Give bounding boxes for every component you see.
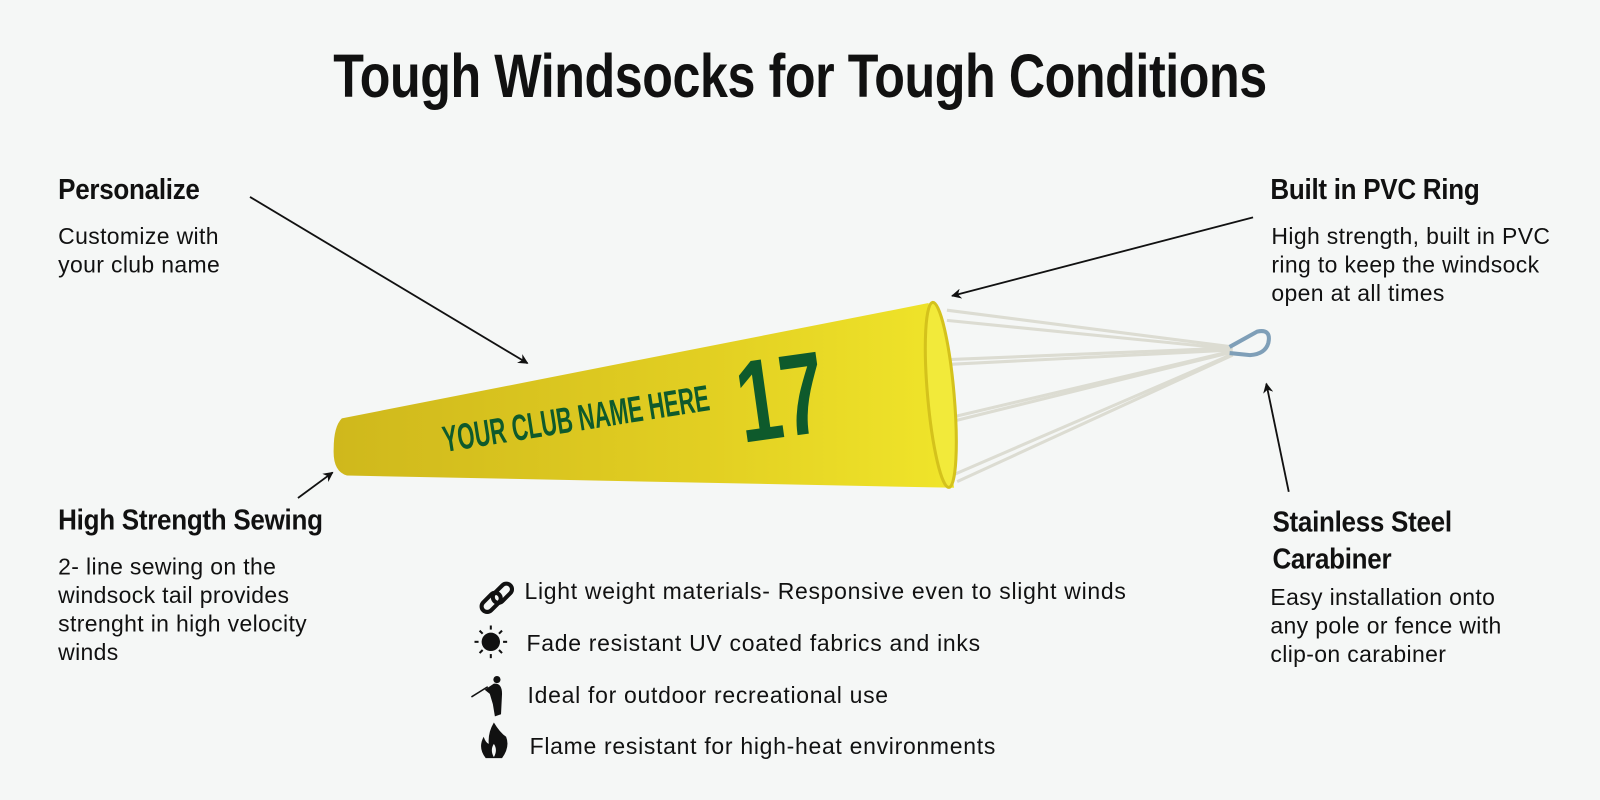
arrow: sewing: [298, 472, 333, 498]
text: [58, 554, 307, 665]
arrow: personalize: [250, 197, 528, 363]
text: windsock tail provides: [58, 583, 289, 608]
panel: carabiner: [1270, 506, 1502, 667]
arrow: pvc ring: [952, 217, 1253, 296]
heading: High Strength Sewing: [58, 504, 323, 536]
text: [1271, 223, 1550, 306]
text: your club name: [58, 252, 220, 278]
icon: golfer: [471, 676, 502, 716]
text: any pole or fence with: [1270, 613, 1502, 639]
text: [1270, 585, 1502, 667]
heading: Carabiner: [1272, 543, 1391, 574]
windsock: [334, 301, 1269, 489]
feature: flame: Flame resistant for high-heat environments: [530, 734, 996, 759]
feature: uv: Fade resistant UV coated fabrics and inks: [527, 631, 981, 656]
heading: [1272, 506, 1452, 574]
text: strenght in high velocity: [58, 611, 307, 637]
heading: Built in PVC Ring: [1270, 173, 1479, 205]
icon: sun: [474, 626, 507, 658]
text: clip-on carabiner: [1270, 642, 1446, 667]
panel: personalize: [58, 173, 220, 278]
ropes: [931, 310, 1233, 482]
text: winds: [58, 640, 119, 665]
text: High strength, built in PVC: [1271, 223, 1550, 249]
text: ring to keep the windsock: [1271, 252, 1539, 278]
windsock: 17: [728, 328, 834, 468]
text: Customize with: [58, 223, 219, 249]
arrow: carabiner: [1266, 384, 1289, 492]
feature: light weight: Light weight materials- Responsive even to slight winds: [524, 579, 1127, 604]
sock body: [334, 303, 954, 488]
feature list: [524, 579, 1127, 759]
text: 2- line sewing on the: [58, 554, 276, 580]
text: Easy installation onto: [1270, 585, 1495, 610]
heading: Personalize: [58, 173, 200, 205]
icon: link: [479, 581, 514, 614]
carabiner: [1230, 331, 1269, 355]
heading: Stainless Steel: [1272, 506, 1452, 538]
sock text: YOUR CLUB NAME HERE: [440, 379, 712, 460]
title: Tough Windsocks for Tough Conditions: [333, 42, 1267, 110]
feature: outdoor: Ideal for outdoor recreational use: [528, 683, 889, 708]
text: [58, 223, 220, 278]
text: open at all times: [1271, 281, 1445, 306]
panel: pvc ring: [1270, 173, 1550, 306]
icon: flame: [481, 722, 507, 758]
panel: sewing: [58, 504, 323, 665]
